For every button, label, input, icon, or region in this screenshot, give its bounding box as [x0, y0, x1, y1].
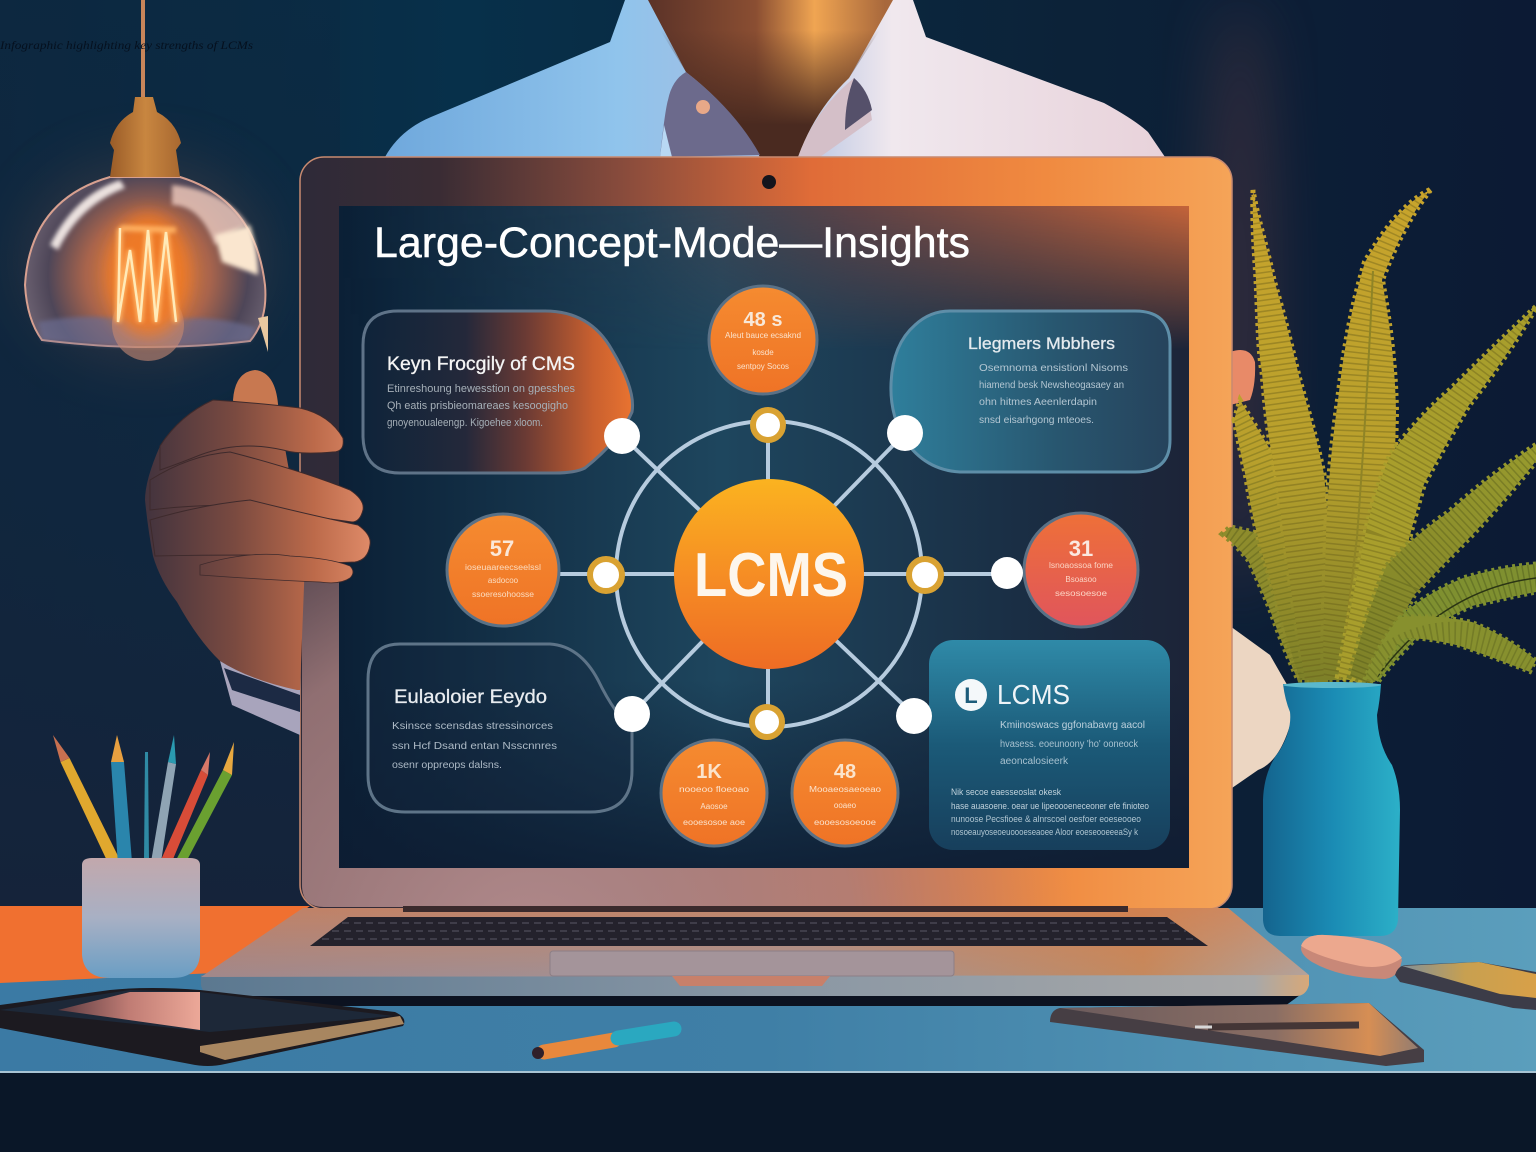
ring finger — [150, 500, 370, 563]
stat circle: 1K: eooesosoe aoe — [683, 818, 746, 827]
yellow pencil — [60, 758, 120, 865]
panel: evaluation: osenr oppreops dalsns. — [392, 760, 502, 771]
panel: LCMS details: hase auasoene. oear ue lipeoooeneceoner efe finioteo — [951, 801, 1149, 812]
frond: bottom right — [1365, 616, 1536, 682]
gold ring nodes — [590, 410, 941, 737]
palm — [145, 402, 305, 690]
thumb — [233, 370, 280, 420]
stat circle: 57: 57 — [490, 536, 514, 561]
panel: LCMS details: Kmiinoswacs ggfonabavrg aacol — [1000, 719, 1145, 731]
glass dome — [25, 177, 265, 347]
stat circle: 48 bottom: Mooaeosaeoeao — [809, 785, 882, 794]
laptop base — [201, 906, 1309, 1006]
blue pencil — [111, 762, 132, 865]
mouse — [1301, 935, 1402, 979]
stat circle: 48 top: 48 s — [744, 309, 782, 331]
frond: middle right — [1350, 445, 1536, 684]
marker pen — [532, 1029, 674, 1059]
screen — [339, 206, 1189, 868]
base side — [201, 975, 1309, 996]
bulb glass — [112, 289, 184, 361]
title: Large-Concept-Mode—Insights — [374, 219, 970, 267]
vase — [1263, 682, 1400, 936]
panel: LCMS details: nunoose Pecsfioee & alnrscoel oesfoer eoeseooeo — [951, 814, 1141, 825]
panel: key strengths — [363, 311, 633, 473]
webcam — [762, 175, 776, 189]
left collar inner — [660, 72, 760, 157]
frond: tall right — [1323, 190, 1430, 680]
panel: learning highlights — [891, 311, 1170, 472]
icon: L badge — [955, 679, 987, 711]
panel: LCMS details: LCMS — [997, 679, 1070, 710]
shirt cuff — [220, 661, 300, 735]
stat circle: 48 bottom: eooesosoeooe — [814, 818, 877, 827]
panel: key strengths: Qh eatis prisbieomareaes kesoogigho — [387, 400, 568, 412]
central LCMS hub: LCMS — [694, 541, 848, 610]
trackpad — [550, 951, 954, 976]
frond: left low — [1217, 527, 1322, 680]
neck — [648, 0, 893, 157]
stat circle: 48 bottom — [792, 740, 898, 846]
panel: LCMS details: nosoeauyoseoeuoooeseaoee Aloor eoeseooeeeaSy k — [951, 827, 1138, 838]
hand holding laptop — [145, 370, 370, 735]
stat circle: 48 top: Aleut bauce ecsaknd — [725, 331, 801, 340]
right hand behind laptop — [1230, 350, 1296, 788]
panel: evaluation: Ksinsce scensdas stressinorces — [392, 721, 553, 732]
pencil cup — [53, 735, 234, 978]
lamp cap — [110, 97, 181, 177]
base shadow — [215, 995, 1300, 1006]
laptop lid — [300, 157, 1232, 909]
panel: LCMS details: aeoncalosieerk — [1000, 756, 1069, 767]
panel: LCMS details — [929, 640, 1170, 850]
stat circle: 31: 31 — [1069, 536, 1093, 561]
stat circle: 1K — [661, 740, 767, 846]
desk — [0, 906, 1536, 1152]
stat circle: 57: ssoeresohoosse — [472, 590, 535, 599]
white connector dots — [604, 415, 1023, 734]
tablet — [0, 988, 404, 1066]
right collar inner — [798, 78, 872, 157]
plant — [1217, 190, 1536, 684]
stat circle: 48 bottom: 48 — [834, 761, 856, 783]
stat circle: 57: ioseuaareecseelssl — [465, 563, 541, 572]
person shirt and neck — [385, 0, 1165, 157]
stat circle: 31: sesosoesoe — [1055, 589, 1108, 598]
keyboard — [310, 917, 1208, 946]
thin teal pencil — [144, 752, 149, 862]
middle finger — [150, 452, 363, 522]
stat circle: 31: lsnoaossoa fome — [1049, 561, 1114, 570]
panel: learning highlights: snsd eisarhgong mteoes. — [979, 415, 1094, 426]
index finger — [160, 400, 343, 470]
frond: left leaning — [1233, 400, 1330, 680]
panel: LCMS details: hvasess. eoeunoony 'ho' ooneock — [1000, 739, 1139, 750]
stat circle: 48 top: kosde — [752, 348, 774, 357]
panel: key strengths: Etinreshoung hewesstion on gpesshes — [387, 383, 575, 395]
green pencil — [174, 770, 232, 864]
frond: upper right — [1338, 307, 1536, 684]
stat circle: 31: Bsoasoo — [1065, 575, 1097, 584]
hanging lamp — [25, 0, 268, 361]
little finger — [200, 554, 353, 583]
panel: evaluation: ssn Hcf Dsand entan Nsscnnres — [392, 741, 557, 752]
frond: tall left — [1253, 190, 1335, 680]
stat circle: 48 top: sentpoy Socos — [737, 362, 789, 371]
stat circle: 48 bottom: ooaeo — [834, 801, 857, 810]
stat circle: 31 — [1024, 513, 1138, 627]
icon: L badge: L — [964, 683, 978, 708]
pencil tip — [258, 316, 268, 352]
grey pencil — [151, 762, 176, 862]
stat circle: 57: asdocoo — [488, 576, 519, 585]
phone — [1395, 962, 1536, 1010]
pencils — [53, 735, 234, 865]
panel: learning highlights: ohn hitmes Aeenlerdapin — [979, 397, 1097, 408]
bulb filament — [106, 213, 190, 337]
central LCMS hub — [674, 479, 864, 669]
red pencil — [160, 770, 208, 864]
stat circle: 48 top — [709, 286, 817, 394]
panel: key strengths: gnoyenoualeengp. Kigoehee xloom. — [387, 417, 543, 429]
stat circle: 1K: Aaosoe — [700, 802, 728, 811]
panel: learning highlights: hiamend besk Newsheogasaey an — [979, 380, 1124, 391]
stat circle: 1K: 1K — [696, 761, 722, 783]
frond: lower right — [1372, 564, 1536, 682]
panel: learning highlights: Llegmers Mbbhers — [968, 334, 1115, 353]
panel: evaluation — [368, 644, 632, 812]
base top surface — [201, 908, 1309, 977]
notebook and stylus — [1050, 1003, 1424, 1066]
panel: LCMS details: Nik secoe eaesseoslat okesk — [951, 787, 1061, 798]
stat circle: 1K: nooeoo floeoao — [679, 785, 750, 794]
connector lines and ring — [560, 421, 1007, 727]
caption: Infographic highlighting key strengths of LCMs — [0, 38, 253, 52]
panel: evaluation: Eulaoloier Eeydo — [394, 687, 547, 708]
panel: learning highlights: Osemnoma ensistionl Nisoms — [979, 363, 1128, 374]
stat circle: 57 — [447, 514, 559, 626]
panel: key strengths: Keyn Frocgily of CMS — [387, 354, 575, 375]
